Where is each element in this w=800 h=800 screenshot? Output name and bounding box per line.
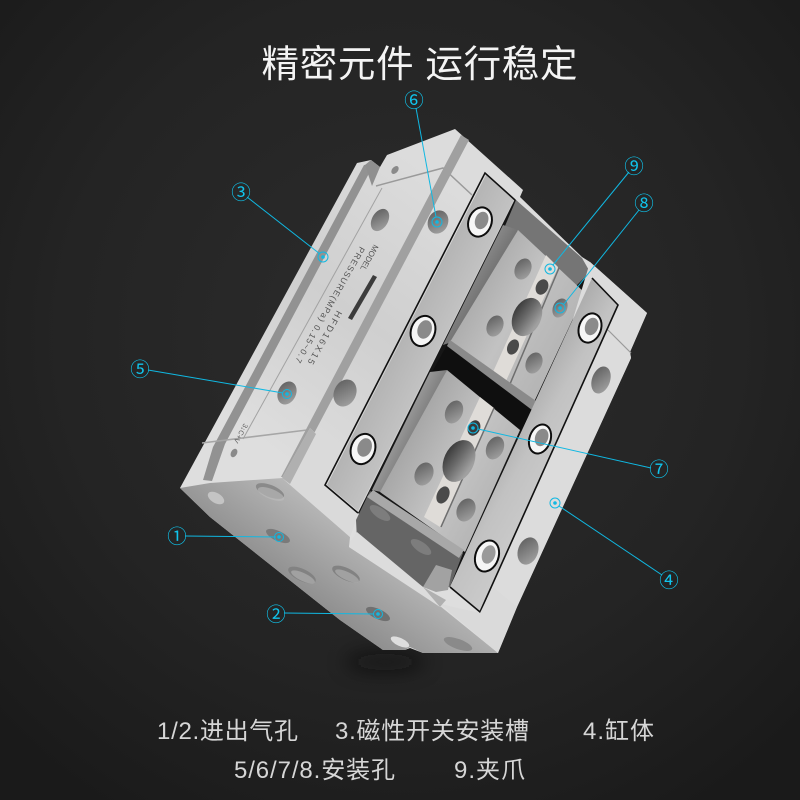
screw	[524, 420, 556, 458]
cross seam	[202, 430, 307, 443]
callout 5	[130, 359, 292, 398]
title: 精密元件 运行稳定	[262, 43, 578, 85]
callout 9	[545, 156, 644, 274]
body holes	[229, 165, 452, 458]
body silhouette	[180, 129, 647, 653]
gap between blocks	[432, 340, 536, 432]
screw	[573, 309, 607, 347]
lower slider block	[380, 370, 520, 552]
upper cross seam	[376, 168, 472, 195]
legend item 9: 9.夹爪	[454, 757, 525, 784]
callout 2: ②	[266, 604, 286, 626]
legend	[157, 718, 654, 784]
callout 7	[468, 423, 669, 481]
callout 1: ①	[167, 526, 187, 548]
nameplate text	[232, 243, 380, 444]
screw	[463, 203, 497, 241]
callout 3	[231, 182, 328, 262]
callout 9: ⑨	[624, 156, 644, 178]
callout 4: ④	[659, 570, 679, 592]
callout 6	[404, 90, 442, 227]
nameplate text: 3↓C+V	[232, 422, 248, 444]
left corner block	[282, 428, 358, 537]
screw	[405, 311, 441, 351]
slot recess	[358, 199, 592, 587]
right rail holes	[514, 364, 614, 568]
screw	[469, 536, 505, 576]
nameplate text: PRESSURE(MPa) 0.15~0.7	[293, 245, 367, 365]
rail seam	[608, 330, 631, 353]
callout 8: ⑧	[634, 193, 654, 215]
left screw plate	[325, 173, 515, 513]
end cap with screws	[356, 490, 464, 592]
callout 7: ⑦	[649, 459, 669, 481]
long stripe	[281, 135, 469, 477]
screw	[345, 429, 381, 469]
callout 8	[555, 193, 654, 313]
upper slider block	[450, 230, 585, 402]
bottom face with ports	[180, 478, 498, 654]
callout 5: ⑤	[130, 359, 150, 381]
callout 2	[266, 604, 382, 626]
nameplate text: MODEL	[358, 243, 380, 273]
callout 4	[550, 498, 679, 592]
right screw plate	[450, 278, 618, 612]
floor shadow	[345, 653, 425, 671]
nameplate text: HFD16X15	[306, 309, 344, 366]
callout 3: ③	[231, 182, 251, 204]
product: pneumatic slide cylinder	[180, 129, 647, 654]
legend item 5/6/7/8: 5/6/7/8.安装孔	[234, 757, 395, 784]
callout 1	[167, 526, 284, 548]
callout 6: ⑥	[404, 90, 424, 112]
right corner block	[349, 532, 517, 653]
recess wall	[505, 200, 590, 288]
left rail groove	[203, 164, 374, 481]
callouts	[130, 90, 679, 626]
upper block bevel	[443, 225, 518, 345]
barcode	[348, 275, 377, 320]
lower block bevel	[372, 370, 447, 493]
plate inner line	[243, 188, 382, 439]
legend item 4: 4.缸体	[583, 718, 654, 745]
legend item 1/2: 1/2.进出气孔	[157, 718, 298, 745]
top wall shade	[365, 160, 380, 186]
right rail	[493, 262, 647, 607]
legend item 3: 3.磁性开关安装槽	[335, 718, 529, 745]
